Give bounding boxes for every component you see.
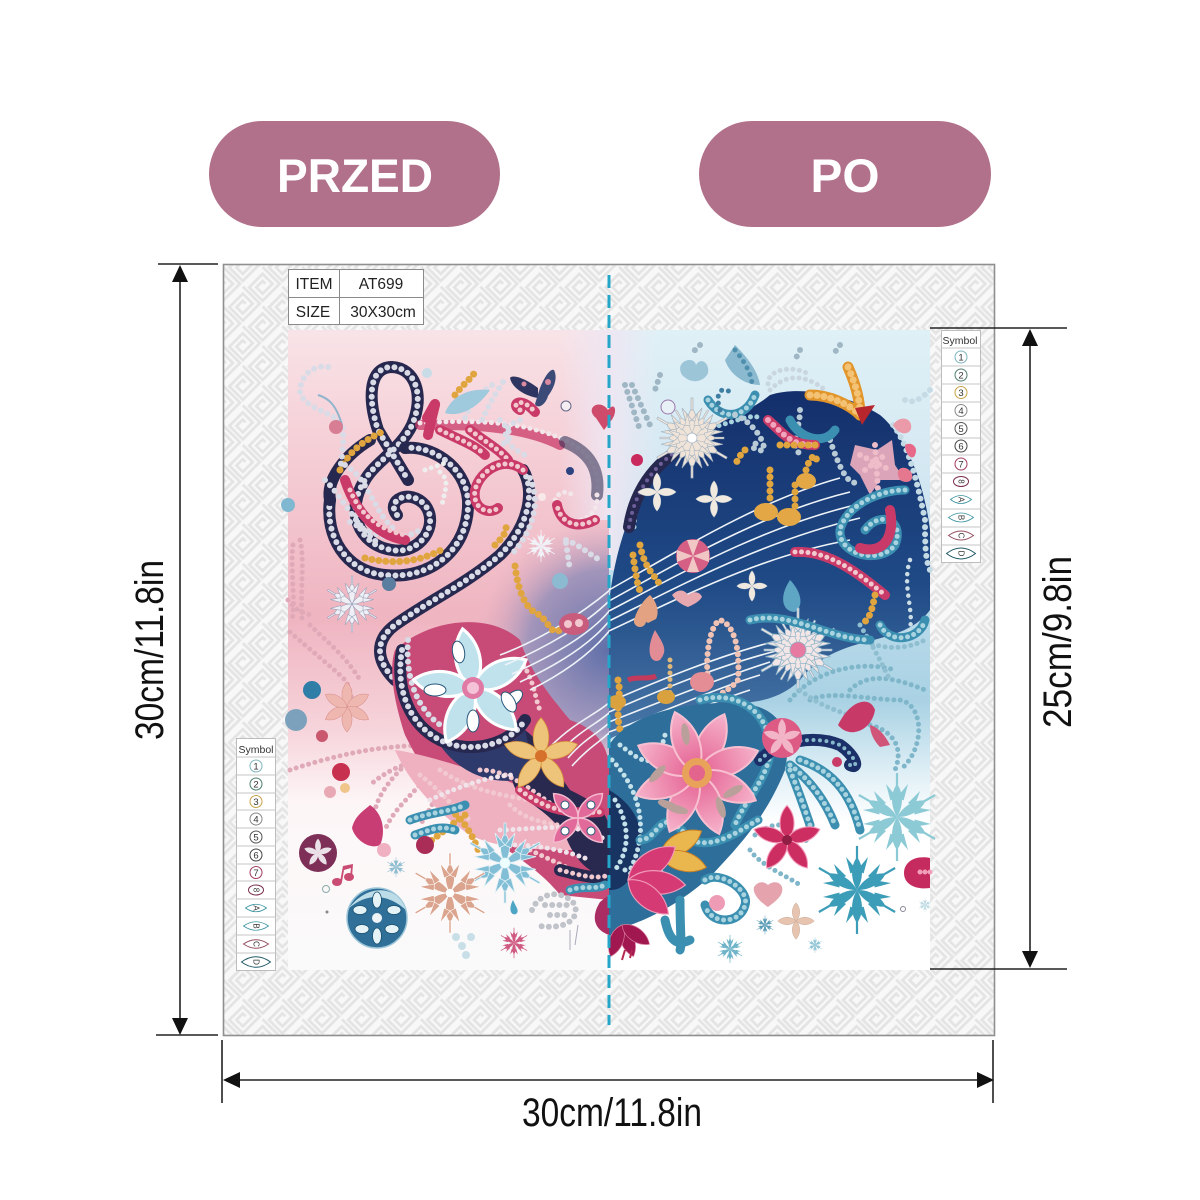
symbol legend, right (942, 330, 980, 562)
pink rose (762, 718, 802, 758)
symbol legend, right: Symbol (942, 335, 978, 347)
panel: patterned canvas (224, 264, 994, 1036)
table: item and size: SIZE (296, 304, 330, 321)
crimson leaves and swirl mass (352, 622, 609, 900)
symbol legend, left: 6 (253, 850, 259, 862)
small white flowers on dark (638, 473, 767, 601)
white snowflake, left (324, 576, 380, 632)
blue snowflakes, right (813, 773, 941, 934)
symbol legend, right: 3 (958, 388, 964, 399)
pink large flower (632, 708, 762, 838)
ornament bauble (299, 834, 337, 872)
symbol legend, right: 8 (956, 479, 966, 484)
spiral and pink ribbon (783, 419, 916, 640)
staff lines, right (609, 478, 860, 742)
treble clef (325, 367, 468, 576)
grey bead cluster (532, 885, 609, 950)
dark blue heart shape (609, 391, 930, 740)
symbol legend, left: 2 (253, 780, 259, 790)
small flakes, bottom left (322, 857, 529, 959)
small flake and note (525, 530, 600, 589)
crimson star flower (752, 805, 822, 872)
symbol legend, right: C (956, 533, 966, 539)
panel: artwork after (right half) (592, 330, 941, 970)
blue balls (281, 498, 396, 798)
dimension: bottom width 30cm (222, 1040, 994, 1135)
symbol legend, left: 8 (252, 888, 260, 893)
symbol legend, right: 7 (958, 460, 964, 470)
dimension: right height 25cm: 25cm/9.8in (1036, 556, 1080, 728)
symbol legend, right: 5 (958, 424, 964, 435)
symbol legend, right: 1 (958, 352, 964, 364)
sparkle snowflake, top left (649, 394, 735, 482)
butterfly (510, 370, 556, 406)
symbol legend, left: 7 (253, 868, 259, 879)
white snowflake, right (752, 604, 844, 696)
pill: PRZED (209, 121, 500, 227)
symbol legend, left (236, 738, 276, 970)
gold notes (633, 445, 818, 592)
staff lines, left (500, 566, 610, 766)
teal flower with pink centre (412, 627, 532, 747)
symbol legend, left: 4 (253, 814, 259, 826)
ornamental top scrolls (592, 345, 930, 570)
dimension: left height 30cm: 30cm/11.8in (128, 560, 172, 740)
orange ribbon (810, 367, 875, 425)
symbol legend, right: B (956, 515, 966, 520)
symbol legend, right: 4 (958, 406, 964, 417)
pink floral sprays, top (300, 367, 598, 524)
symbol legend, left: Symbol (238, 744, 274, 756)
music note, pink (332, 864, 354, 886)
symbol legend, right: 2 (958, 370, 964, 382)
table: item and size (288, 270, 424, 324)
table: item and size: 30X30cm (350, 304, 416, 321)
pink four-petal flower (549, 789, 607, 847)
dimension: right height 25cm (930, 328, 1080, 969)
red tulip (832, 702, 890, 767)
blue snowflake (465, 823, 545, 903)
pill: PO: PO (810, 149, 880, 202)
blue mandala ball (347, 888, 407, 948)
pink heart (754, 882, 782, 907)
second clef curl and sweep (380, 464, 535, 680)
symbol legend, right: 6 (958, 442, 964, 452)
crimson and gold petals (604, 812, 725, 959)
pink branches, left (288, 540, 450, 830)
peach snowflake (410, 853, 490, 933)
pill: PO (699, 121, 991, 227)
symbol legend, right: D (956, 551, 966, 557)
dimension: bottom width 30cm: 30cm/11.8in (522, 1091, 702, 1135)
crimson ball (904, 857, 930, 888)
table: item and size: AT699 (359, 276, 403, 293)
symbol legend, left: C (252, 941, 260, 947)
symbol legend, left: A (252, 905, 260, 911)
gold flower (502, 718, 580, 792)
symbol legend, left: B (252, 923, 260, 929)
pink pinwheel ball (676, 539, 710, 573)
panel: artwork before (left half) (281, 330, 610, 970)
table: item and size: ITEM (295, 276, 333, 293)
symbol legend, left: 3 (253, 797, 259, 808)
symbol legend, left: 1 (253, 762, 259, 772)
dashed centre divider (608, 275, 610, 1025)
peach flower, left (323, 682, 371, 732)
dimension: left height 30cm (128, 264, 218, 1035)
pill: PRZED: PRZED (277, 149, 433, 202)
symbol legend, left: D (252, 959, 260, 965)
symbol legend, left: 5 (253, 832, 259, 844)
small flakes and charm, bottom right (622, 898, 932, 963)
pink star (850, 440, 905, 495)
symbol legend, right: A (956, 497, 966, 503)
teal leaf mass and scrolls (609, 618, 925, 950)
notes, lower staff (608, 590, 738, 730)
